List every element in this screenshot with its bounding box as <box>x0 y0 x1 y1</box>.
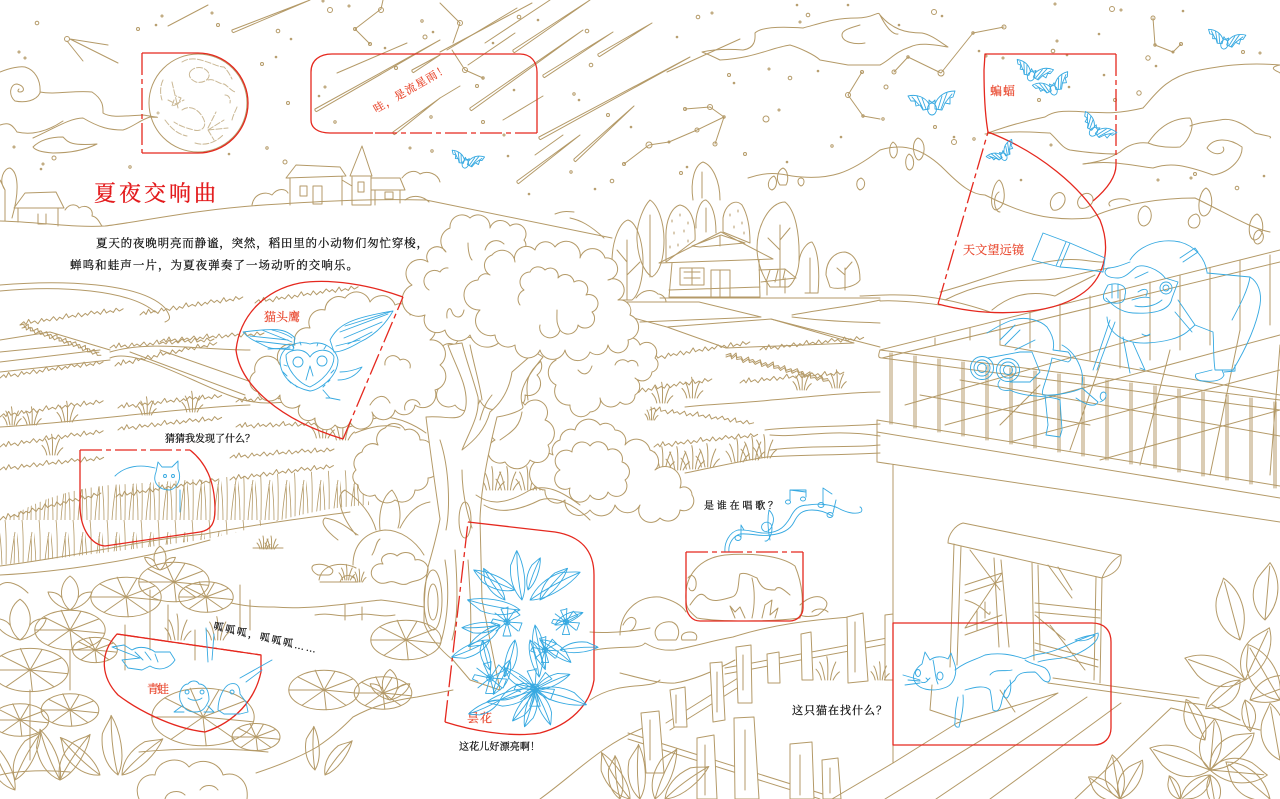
constellations <box>64 0 1182 166</box>
red frame: meteor shower <box>311 54 537 133</box>
mountains right <box>692 138 1270 244</box>
icon: cat <box>903 633 1098 727</box>
tree lobe: bottom right <box>530 419 694 522</box>
big leaves bottom right <box>1083 561 1280 799</box>
icon: owl <box>243 311 393 400</box>
label: bats: 蝙蝠 <box>990 83 1015 98</box>
intro text: 蝉鸣和蛙声一片，为夏夜弹奏了一场动听的交响乐。 <box>70 258 358 272</box>
tree lobe: middle <box>433 337 542 411</box>
stars <box>13 0 1265 195</box>
red frame: owl <box>236 281 403 439</box>
icon: music notes <box>725 488 862 552</box>
icon: epiphyllum plant <box>451 550 598 728</box>
tree lobe: lower right small <box>488 400 554 469</box>
central tree <box>250 215 694 690</box>
cat window <box>948 523 1240 720</box>
icon: telescope and tripod <box>1032 233 1145 373</box>
lotus pond left <box>0 546 441 799</box>
terraced rice fields right <box>481 336 880 490</box>
trunk knots <box>424 502 471 630</box>
intro text <box>70 236 428 272</box>
reeds left <box>0 465 370 566</box>
tree lobe: right small <box>548 330 658 417</box>
rolling hills right <box>860 259 1110 312</box>
wooden fence <box>628 613 893 799</box>
far scene centre: house and trees <box>555 200 880 348</box>
bats <box>448 25 1246 173</box>
icon: hidden cat in reeds <box>115 461 180 512</box>
rock cluster right of flower <box>620 554 828 640</box>
trunk details <box>349 345 590 650</box>
tree lobe: left <box>250 292 446 430</box>
plank floor <box>885 685 1260 799</box>
label: meteor shower: 哇，是流星雨！ <box>370 61 450 116</box>
label: guess what I found: 猜猜我发现了什么？ <box>165 432 255 445</box>
red frame: frogs <box>104 634 261 732</box>
icon: moon <box>149 54 247 152</box>
label: frog: 青蛙 <box>147 681 169 696</box>
red frame: singing rock <box>686 552 803 621</box>
tree crown: top <box>402 215 549 347</box>
icon: frogs <box>112 628 272 714</box>
label: what is this cat looking for: 这只猫在找什么？ <box>792 703 887 717</box>
red frame: cat <box>893 623 1111 745</box>
label: who is singing: 是谁在唱歌？ <box>704 499 778 512</box>
label: frog croak: 呱呱呱，呱呱呱…… <box>212 619 318 656</box>
label: epiphyllum: 昙花 <box>467 711 492 725</box>
crown inner scallops <box>370 241 638 502</box>
bottom centre plants <box>590 744 711 799</box>
rocks and bushes at tree foot <box>253 490 430 584</box>
clouds top right <box>702 13 1280 175</box>
tree lobe: lower left <box>353 424 439 503</box>
far village left <box>0 146 612 238</box>
tree crown: main right <box>464 241 639 361</box>
rice fields left <box>0 283 359 470</box>
red frame: bats <box>984 54 1116 201</box>
red frame: rice field <box>80 450 215 546</box>
red frame: night-blooming flower <box>445 522 594 735</box>
icon: boy with binoculars <box>970 318 1106 437</box>
icon: man with telescope <box>1103 241 1261 381</box>
label: pretty flower: 这花儿好漂亮啊！ <box>459 740 540 753</box>
intro text: 夏天的夜晚明亮而静谧，突然，稻田里的小动物们匆忙穿梭， <box>96 236 428 250</box>
pond banks <box>0 540 851 799</box>
title: 夏夜交响曲 <box>94 181 216 206</box>
red frame: telescope <box>938 132 1106 313</box>
label: owl: 猫头鹰 <box>264 309 300 324</box>
red frame: moon <box>142 53 248 153</box>
clouds left <box>0 67 158 153</box>
tree trunk <box>424 343 543 690</box>
label: telescope: 天文望远镜 <box>963 242 1024 257</box>
balcony deck and railings <box>832 250 1280 799</box>
meteor shower <box>168 0 740 184</box>
